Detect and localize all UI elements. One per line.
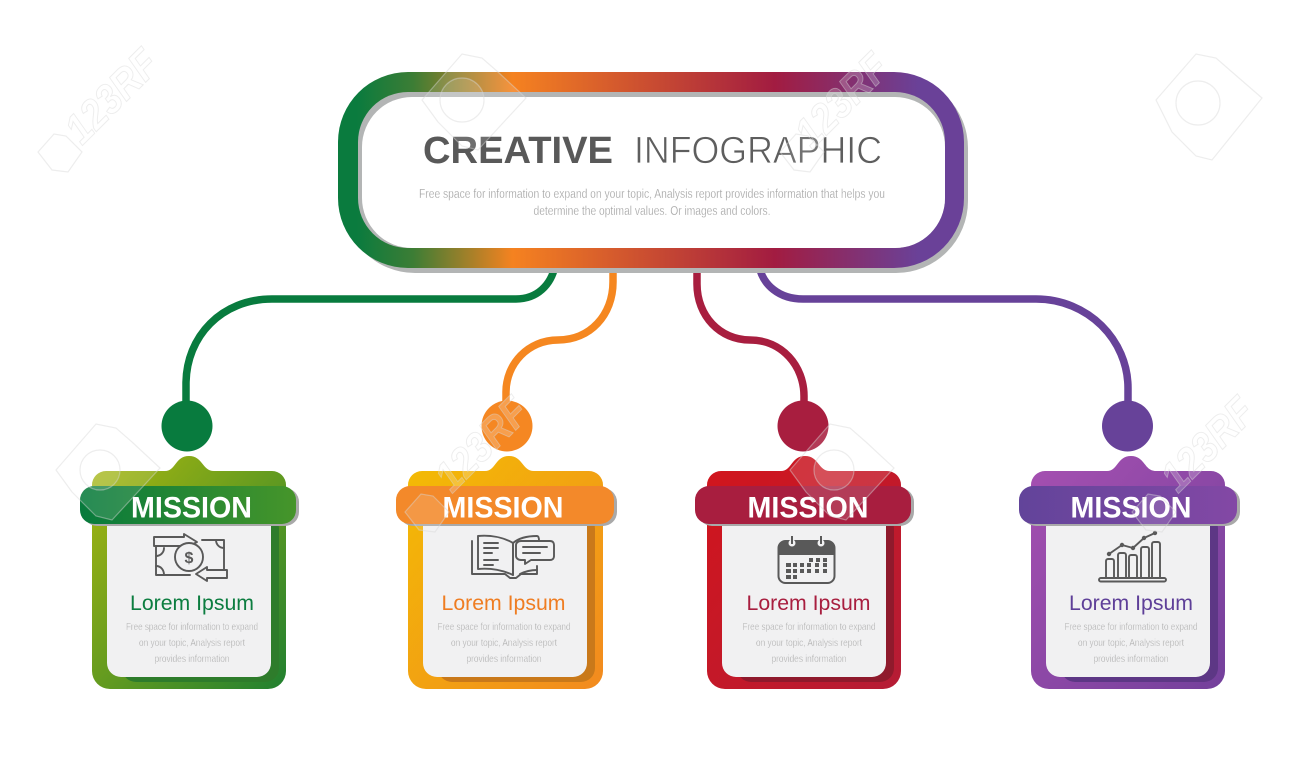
title: CREATIVE	[423, 130, 613, 172]
body text	[742, 621, 876, 665]
content panel	[1046, 510, 1210, 677]
banner label: MISSION	[1070, 492, 1192, 524]
body text	[126, 621, 258, 665]
card body	[1031, 456, 1225, 689]
node	[1102, 400, 1153, 452]
watermark: frame right wordmark: 123RF	[785, 43, 898, 156]
banner	[396, 486, 614, 524]
content panel	[423, 510, 587, 677]
card body	[92, 456, 286, 689]
body text: provides information	[1094, 653, 1169, 665]
watermark: card 3 logo	[790, 424, 894, 520]
watermark: card 4 wordmark	[1132, 387, 1264, 532]
body text: provides information	[154, 653, 230, 665]
content panel	[107, 510, 271, 677]
node	[778, 400, 828, 452]
frame shadow	[343, 76, 968, 273]
gradient frame	[338, 72, 964, 268]
frame interior	[362, 97, 945, 248]
body text: Free space for information to expand	[742, 621, 876, 633]
card inner shadow	[737, 515, 894, 682]
banner shadow	[1022, 488, 1240, 526]
node	[482, 400, 532, 452]
heading: Lorem Ipsum	[746, 592, 870, 615]
body text: provides information	[466, 653, 542, 665]
panel: card 4 purple	[1019, 400, 1240, 689]
description: determine the optimal values. Or images and colors.	[534, 204, 770, 218]
body text: on your topic, Analysis report	[451, 637, 557, 649]
panel: card 2 orange	[396, 400, 617, 689]
banner label: MISSION	[131, 492, 252, 524]
body text: Free space for information to expand	[126, 621, 258, 633]
heading: Lorem Ipsum	[130, 592, 254, 615]
card body	[408, 456, 603, 689]
body text	[438, 621, 571, 665]
banner shadow	[83, 488, 299, 526]
body text	[1064, 621, 1198, 665]
banner	[695, 486, 911, 524]
watermark: top left wordmark: 123RF	[55, 39, 168, 152]
body text: provides information	[772, 653, 847, 665]
heading: Lorem Ipsum	[1069, 592, 1193, 615]
watermark: frame left logo	[422, 54, 526, 150]
watermark: card 1 logo	[56, 424, 160, 520]
connector: orange	[506, 266, 613, 404]
body text: on your topic, Analysis report	[139, 637, 245, 649]
banner	[1019, 486, 1237, 524]
description: Free space for information to expand on your topic, Analysis report provides information that helps you	[419, 187, 885, 201]
card inner shadow	[1061, 515, 1218, 682]
watermark: top left wordmark	[38, 39, 168, 172]
icon: calendar	[778, 536, 835, 583]
content panel	[722, 510, 886, 677]
banner shadow	[399, 488, 617, 526]
icon: rising bar chart	[1099, 531, 1166, 582]
card inner shadow	[122, 515, 279, 682]
panel: card 1 green	[80, 400, 299, 689]
title: INFOGRAPHIC	[634, 130, 882, 172]
card body	[707, 456, 901, 689]
banner shadow	[698, 488, 914, 526]
body text: Free space for information to expand	[438, 621, 571, 633]
heading: Lorem Ipsum	[442, 592, 566, 615]
watermark overlay	[38, 39, 1264, 532]
watermark: card 2 wordmark	[405, 387, 538, 532]
card inner shadow	[438, 515, 595, 682]
watermark: card 2 wordmark: 123RF	[425, 387, 538, 500]
body text: on your topic, Analysis report	[756, 637, 862, 649]
banner	[80, 486, 296, 524]
connector: red	[697, 266, 804, 404]
banner label: MISSION	[748, 492, 868, 524]
description	[419, 187, 885, 218]
icon: money exchange	[154, 534, 227, 581]
body text: Free space for information to expand	[1064, 621, 1198, 633]
panel: card 3 red	[695, 400, 914, 689]
watermark: card 4 wordmark: 123RF	[1151, 387, 1264, 500]
connector: purple	[759, 266, 1128, 404]
node	[162, 400, 212, 452]
title	[423, 130, 882, 172]
frame inner shadow	[358, 92, 945, 248]
connector: green	[186, 266, 555, 404]
body text: on your topic, Analysis report	[1078, 637, 1184, 649]
watermark: top right logo	[1156, 54, 1262, 160]
banner label: MISSION	[442, 492, 564, 524]
icon: money exchange: $	[185, 550, 194, 567]
icon: open book with chat bubble	[472, 536, 554, 578]
panel: central title frame	[338, 72, 968, 273]
